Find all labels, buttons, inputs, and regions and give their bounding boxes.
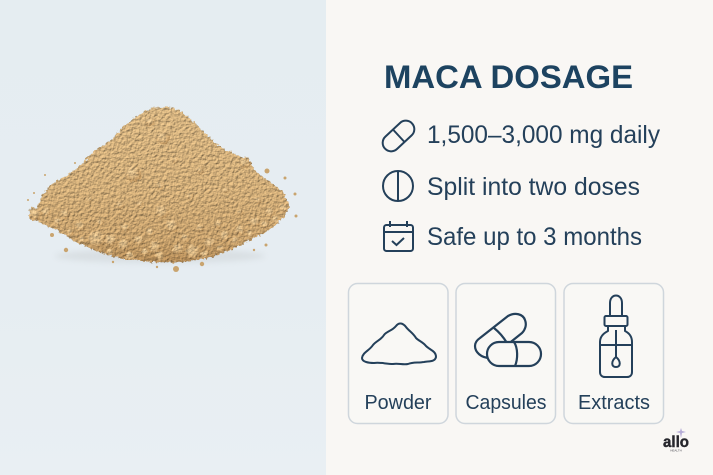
panel: photo background [0, 0, 326, 475]
logo: allo health: allo [663, 434, 689, 451]
image: maca powder pile [27, 107, 298, 272]
label: extracts: Extracts [578, 392, 650, 414]
icon: pill [379, 117, 418, 155]
panel: dosage background [326, 0, 713, 475]
icon: dropper bottle [600, 296, 632, 377]
logo: allo health: HEALTH [670, 448, 682, 452]
split text: Split into two doses [427, 173, 640, 201]
icon: capsules [475, 314, 541, 366]
icon: split circle [383, 171, 413, 201]
logo: allo health [663, 428, 689, 452]
icon: powder mound [362, 323, 436, 364]
safety text: Safe up to 3 months [427, 223, 642, 251]
card: powder [348, 284, 448, 424]
label: capsules: Capsules [466, 392, 546, 414]
dose text: 1,500–3,000 mg daily [427, 121, 660, 149]
icon: calendar [384, 221, 413, 251]
title: MACA DOSAGE [384, 59, 633, 95]
card: capsules [456, 284, 556, 424]
label: powder: Powder [364, 392, 432, 414]
card: extracts [564, 284, 664, 424]
